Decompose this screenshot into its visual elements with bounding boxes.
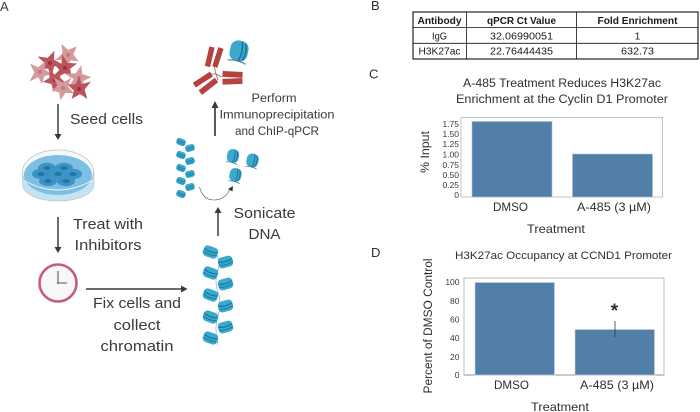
bar chart D: Percent of DMSO Control: [423, 258, 435, 394]
chart C title: Enrichment at the Cyclin D1 Promoter: [456, 94, 668, 106]
arrow: treat with inhibitors: [54, 217, 62, 253]
bar chart C: DMSO: [493, 200, 528, 214]
text: fix cells and collect chromatin: chromatin: [100, 339, 174, 355]
panel: workflow A: [0, 0, 334, 355]
arrow: curved fragmenting: [200, 186, 233, 200]
bar chart C: 0.50: [442, 170, 459, 180]
bar chart C: 1.00: [442, 150, 459, 160]
text: sonicate DNA: Sonicate: [234, 206, 296, 222]
arrow: seed cells: [54, 104, 62, 140]
table: 1: [635, 32, 641, 42]
icon: culture dish: [22, 150, 94, 201]
chart C x-axis title: Treatment: [527, 222, 586, 236]
bar chart C: 0.25: [442, 180, 459, 190]
table: qPCR Ct Value: [487, 16, 556, 27]
bar chart D: 80: [450, 296, 460, 306]
panel: chart C: [369, 66, 668, 236]
label D: D: [371, 245, 380, 260]
bar chart D: 40: [450, 333, 460, 343]
text: treat with inhibitors: Inhibitors: [74, 238, 142, 254]
text: perform immunoprecipitation and ChIP-qPCR: Perform: [252, 93, 296, 105]
icon: antibody: [193, 46, 243, 95]
bar chart C: % Input: [418, 130, 432, 173]
arrow: fix cells: [86, 286, 188, 292]
icon: seeded cells: [21, 38, 98, 107]
table: 32.06990051: [490, 32, 553, 42]
bar chart D: 20: [450, 352, 460, 362]
icon: clock: [40, 264, 76, 302]
bar chart D: DMSO: [494, 378, 529, 392]
table: 22.76444435: [490, 46, 553, 58]
bar chart C: 1.50: [442, 129, 459, 139]
icon: free nucleosomes: [226, 148, 260, 184]
bar chart C: 0: [454, 190, 459, 200]
table: 632.73: [621, 46, 654, 58]
text: fix cells and collect chromatin: Fix cells and: [93, 296, 181, 312]
bar chart C: 0.75: [442, 160, 459, 170]
chart C title: A-485 Treatment Reduces H3K27ac: [463, 78, 661, 90]
text: sonicate DNA: DNA: [248, 227, 281, 243]
icon: small chromatin: [175, 137, 195, 199]
bar chart D: A-485 (3 µM): [580, 378, 654, 392]
panel: table B: [371, 0, 698, 59]
arrow: immunoprecipitation: [212, 101, 218, 136]
icon: chromatin: [202, 244, 234, 346]
table: H3K27ac: [418, 46, 460, 58]
bar chart C: 1.25: [442, 139, 459, 149]
bar chart D: [423, 258, 664, 394]
text: seed cells: Seed cells: [70, 111, 143, 128]
text: perform immunoprecipitation and ChIP-qPCR: Immunoprecipitation: [220, 110, 334, 122]
bar chart D: 0: [455, 370, 460, 380]
text: fix cells and collect chromatin: collect: [114, 318, 160, 334]
bar chart C: [418, 118, 662, 214]
table: Antibody: [418, 16, 462, 27]
panel: chart D: [371, 245, 672, 412]
table: IgG: [432, 32, 447, 42]
bar chart C: 1.75: [442, 119, 459, 129]
table: Fold Enrichment: [598, 16, 678, 27]
bar chart D: *: [611, 301, 619, 322]
icon: bound nucleosome: [228, 39, 250, 64]
bar chart D: 100: [445, 277, 460, 287]
text: treat with inhibitors: Treat with: [73, 217, 143, 233]
bar chart D: 60: [450, 314, 460, 324]
label C: C: [369, 66, 378, 82]
bar chart C: A-485 (3 µM): [577, 200, 651, 214]
chart D title: H3K27ac Occupancy at CCND1 Promoter: [455, 250, 672, 262]
arrow: sonicate: [214, 207, 222, 236]
text: perform immunoprecipitation and ChIP-qPCR: and ChIP-qPCR: [235, 126, 319, 138]
table: [413, 12, 698, 59]
